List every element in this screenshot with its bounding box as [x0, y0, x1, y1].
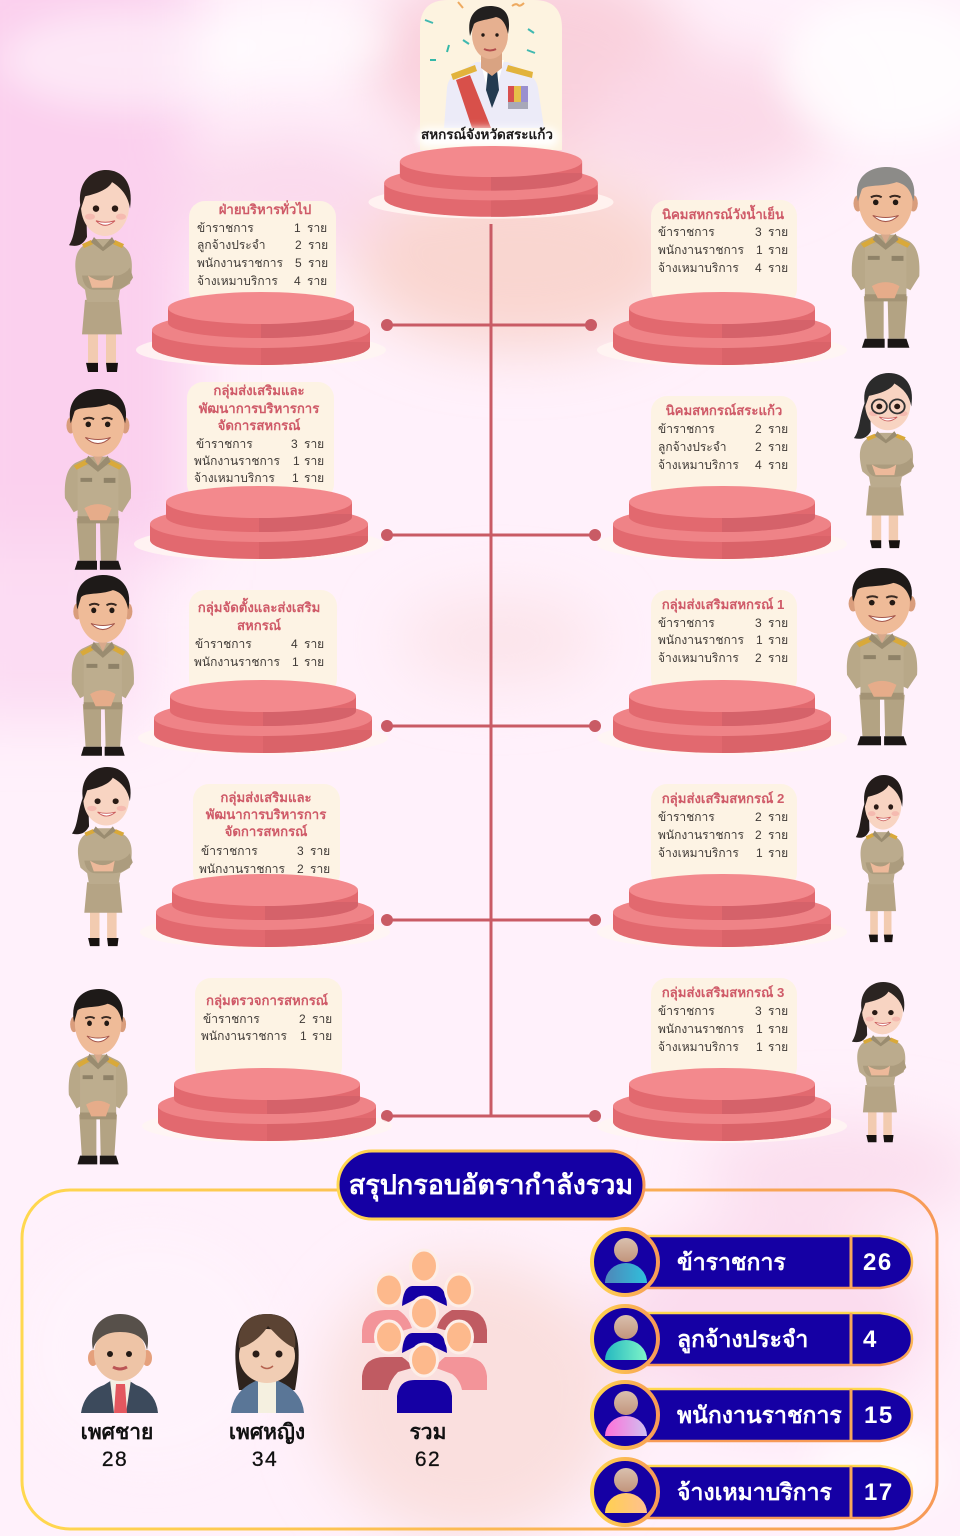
panel: general administration: ราย	[308, 256, 328, 270]
panel: management development group: ราย	[310, 844, 330, 858]
panel: management development group: ราย	[310, 862, 330, 876]
panel: cooperative management promotion group: ราย	[304, 471, 324, 485]
figure: man officer 5	[69, 989, 127, 1164]
panel: cooperative management promotion group: ข้าราชการ	[196, 437, 253, 451]
panel: cooperative inspection group: กลุ่มตรวจการสหกรณ์	[206, 993, 328, 1009]
panel: cooperative management promotion group: พัฒนาการบริหารการ	[199, 401, 320, 416]
row: contract staff: 17	[864, 1479, 894, 1506]
row: government officials: ข้าราชการ	[677, 1249, 786, 1275]
panel: cooperative promotion group 3: ราย	[768, 1022, 788, 1036]
panel: staffing summary	[22, 1190, 937, 1529]
panel: wang nam yen settlement: ราย	[768, 243, 788, 257]
panel: cooperative management promotion group: ราย	[304, 437, 324, 451]
panel: establishment and promotion group	[138, 590, 388, 755]
panel: cooperative promotion group 2: พนักงานราชการ	[658, 828, 745, 842]
label: total count	[410, 1421, 446, 1471]
panel: sa kaeo settlement: 2	[755, 422, 762, 436]
icon: group of people	[362, 1250, 487, 1413]
panel: cooperative promotion group 3: จ้างเหมาบริการ	[658, 1040, 739, 1054]
panel: sa kaeo settlement: ลูกจ้างประจำ	[658, 440, 727, 455]
panel: cooperative promotion group 3: 3	[755, 1004, 762, 1018]
figure: woman officer with glasses	[854, 373, 914, 548]
panel: wang nam yen settlement: พนักงานราชการ	[658, 243, 745, 257]
panel: cooperative inspection group	[142, 978, 392, 1143]
row: government employees: 15	[864, 1402, 894, 1429]
panel: cooperative promotion group 1: 2	[755, 651, 762, 665]
panel: general administration: ราย	[307, 221, 327, 235]
panel: general administration: 2	[295, 238, 302, 252]
label: male count: เพศชาย	[81, 1421, 153, 1444]
row: government officials: 26	[863, 1249, 893, 1276]
panel: wang nam yen settlement: นิคมสหกรณ์วังน้ำเย็น	[662, 204, 784, 222]
timeline connector	[382, 224, 600, 1120]
panel: cooperative inspection group: 2	[299, 1012, 306, 1026]
panel: wang nam yen settlement: 3	[755, 225, 762, 239]
panel: provincial cooperative officer	[418, 0, 562, 150]
panel: cooperative promotion group 3: พนักงานราชการ	[658, 1022, 745, 1036]
figure: woman officer 5	[856, 775, 904, 942]
panel: cooperative promotion group 3	[597, 978, 847, 1143]
panel: management development group: พนักงานราชการ	[199, 862, 286, 876]
panel: management development group: กลุ่มส่งเสริมและ	[220, 790, 312, 806]
panel: general administration: ราย	[308, 238, 328, 252]
panel: cooperative promotion group 2: 1	[756, 846, 763, 860]
figure: man officer 4	[847, 568, 917, 745]
panel: wang nam yen settlement: ราย	[768, 261, 788, 275]
panel: cooperative promotion group 2: 2	[755, 810, 762, 824]
panel: cooperative inspection group: ราย	[312, 1029, 332, 1043]
panel: general administration: พนักงานราชการ	[197, 256, 284, 270]
heading: provincial cooperative: สหกรณ์จังหวัดสระแก้ว	[421, 126, 553, 142]
panel: establishment and promotion group: พนักงานราชการ	[194, 655, 281, 669]
panel: cooperative promotion group 3: กลุ่มส่งเสริมสหกรณ์ 3	[662, 985, 784, 1001]
icon: male staff	[81, 1314, 158, 1413]
panel: wang nam yen settlement: 1	[756, 243, 763, 257]
panel: cooperative promotion group 1: ข้าราชการ	[658, 616, 715, 630]
row: government employees: พนักงานราชการ	[677, 1402, 842, 1428]
label: female count: เพศหญิง	[229, 1421, 305, 1445]
panel: cooperative promotion group 3: ราย	[768, 1004, 788, 1018]
panel: establishment and promotion group: สหกรณ์	[237, 618, 281, 633]
panel: cooperative management promotion group: จัดการสหกรณ์	[218, 418, 300, 433]
panel: wang nam yen settlement: ข้าราชการ	[658, 225, 715, 239]
figure: man officer 3	[72, 575, 134, 756]
panel: cooperative promotion group 1: ราย	[768, 633, 788, 647]
panel: cooperative management promotion group: 3	[291, 437, 298, 451]
panel: establishment and promotion group: 1	[292, 655, 299, 669]
panel: establishment and promotion group: ข้าราชการ	[195, 637, 252, 651]
panel: cooperative inspection group: พนักงานราชการ	[201, 1029, 288, 1043]
panel: general administration	[136, 199, 386, 367]
panel: sa kaeo settlement: ราย	[768, 440, 788, 454]
panel: cooperative promotion group 2: 2	[755, 828, 762, 842]
panel: management development group: พัฒนาการบริหารการ	[206, 807, 327, 822]
panel: cooperative management promotion group: พนักงานราชการ	[194, 454, 281, 468]
panel: cooperative promotion group 2: ราย	[768, 846, 788, 860]
panel: cooperative promotion group 2	[597, 784, 847, 949]
panel: cooperative management promotion group: 1	[292, 471, 299, 485]
row: permanent employees: ลูกจ้างประจำ	[677, 1326, 808, 1354]
panel: wang nam yen settlement: 4	[755, 261, 762, 275]
panel: cooperative inspection group: ข้าราชการ	[203, 1012, 260, 1026]
panel: wang nam yen settlement	[597, 200, 847, 367]
panel: sa kaeo settlement: 4	[755, 458, 762, 472]
figure: woman officer 1	[69, 170, 133, 372]
panel: cooperative inspection group: ราย	[312, 1012, 332, 1026]
panel: cooperative promotion group 1: ราย	[768, 651, 788, 665]
panel: sa kaeo settlement: ราย	[768, 458, 788, 472]
panel: establishment and promotion group: ราย	[304, 637, 324, 651]
panel: cooperative inspection group: 1	[300, 1029, 307, 1043]
panel: cooperative promotion group 1: กลุ่มส่งเสริมสหกรณ์ 1	[662, 597, 784, 613]
label: female count: 34	[252, 1448, 278, 1471]
panel: management development group: จัดการสหกรณ์	[225, 824, 307, 839]
panel: sa kaeo settlement: 2	[755, 440, 762, 454]
panel: sa kaeo settlement: ราย	[768, 422, 788, 436]
panel: management development group: 3	[297, 844, 304, 858]
figure: man officer grey hair	[852, 167, 919, 348]
panel: establishment and promotion group: ราย	[304, 655, 324, 669]
panel: cooperative promotion group 3: 1	[756, 1040, 763, 1054]
panel: cooperative promotion group 1: ราย	[768, 616, 788, 630]
panel: cooperative promotion group 2: กลุ่มส่งเสริมสหกรณ์ 2	[662, 791, 784, 807]
row: contract staff	[592, 1459, 912, 1525]
panel: general administration: ข้าราชการ	[197, 221, 254, 235]
panel: cooperative promotion group 2: ราย	[768, 828, 788, 842]
panel: management development group: ข้าราชการ	[201, 844, 258, 858]
panel: cooperative management promotion group: 1	[293, 454, 300, 468]
panel: wang nam yen settlement: จ้างเหมาบริการ	[658, 261, 739, 275]
figure: woman officer 6	[852, 982, 906, 1142]
panel: general administration: ลูกจ้างประจำ	[197, 238, 266, 253]
row: permanent employees	[592, 1306, 912, 1372]
panel: cooperative promotion group 1	[597, 590, 847, 755]
panel: sa kaeo settlement	[597, 396, 847, 561]
podium: top	[368, 146, 614, 219]
panel: cooperative promotion group 3: ราย	[768, 1040, 788, 1054]
panel: cooperative promotion group 2: ข้าราชการ	[658, 810, 715, 824]
icon: female staff	[231, 1314, 304, 1413]
panel: cooperative management promotion group	[134, 382, 384, 561]
label: male count: 28	[102, 1448, 128, 1471]
row: government officials	[592, 1229, 912, 1295]
panel: management development group: 2	[297, 862, 304, 876]
label: male count	[81, 1421, 153, 1471]
panel: general administration: 1	[294, 221, 301, 235]
row: permanent employees: 4	[863, 1326, 878, 1353]
panel: cooperative management promotion group: ราย	[304, 454, 324, 468]
label: total count: 62	[415, 1448, 441, 1471]
panel: cooperative promotion group 2: จ้างเหมาบริการ	[658, 846, 739, 860]
row: government employees	[592, 1382, 912, 1448]
panel: cooperative management promotion group: จ้างเหมาบริการ	[194, 471, 275, 485]
panel: general administration: 4	[294, 274, 301, 288]
panel: cooperative management promotion group: กลุ่มส่งเสริมและ	[213, 383, 305, 399]
panel: sa kaeo settlement: จ้างเหมาบริการ	[658, 458, 739, 472]
figure: man officer 2	[65, 389, 131, 570]
panel: establishment and promotion group: กลุ่มจัดตั้งและส่งเสริม	[198, 597, 320, 616]
panel: wang nam yen settlement: ราย	[768, 225, 788, 239]
panel: general administration: ฝ่ายบริหารทั่วไป	[219, 199, 311, 217]
panel: management development group	[140, 784, 390, 949]
panel: cooperative promotion group 3: 1	[756, 1022, 763, 1036]
title pill: staffing summary: สรุปกรอบอัตรากำลังรวม	[349, 1170, 633, 1202]
panel: sa kaeo settlement: นิคมสหกรณ์สระแก้ว	[666, 403, 782, 418]
panel: cooperative promotion group 1: 1	[756, 633, 763, 647]
panel: general administration: จ้างเหมาบริการ	[197, 274, 278, 288]
panel: general administration: 5	[295, 256, 302, 270]
label: female count	[229, 1421, 305, 1471]
panel: cooperative promotion group 3: ข้าราชการ	[658, 1004, 715, 1018]
title pill: staffing summary	[338, 1151, 644, 1219]
panel: cooperative promotion group 2: ราย	[768, 810, 788, 824]
panel: cooperative promotion group 1: จ้างเหมาบริการ	[658, 651, 739, 665]
panel: establishment and promotion group: 4	[291, 637, 298, 651]
figure: woman officer 4	[72, 767, 133, 946]
panel: cooperative promotion group 1: 3	[755, 616, 762, 630]
panel: cooperative promotion group 1: พนักงานราชการ	[658, 633, 745, 647]
row: contract staff: จ้างเหมาบริการ	[677, 1479, 833, 1505]
panel: general administration: ราย	[307, 274, 327, 288]
label: total count: รวม	[410, 1421, 446, 1444]
panel: sa kaeo settlement: ข้าราชการ	[658, 422, 715, 436]
